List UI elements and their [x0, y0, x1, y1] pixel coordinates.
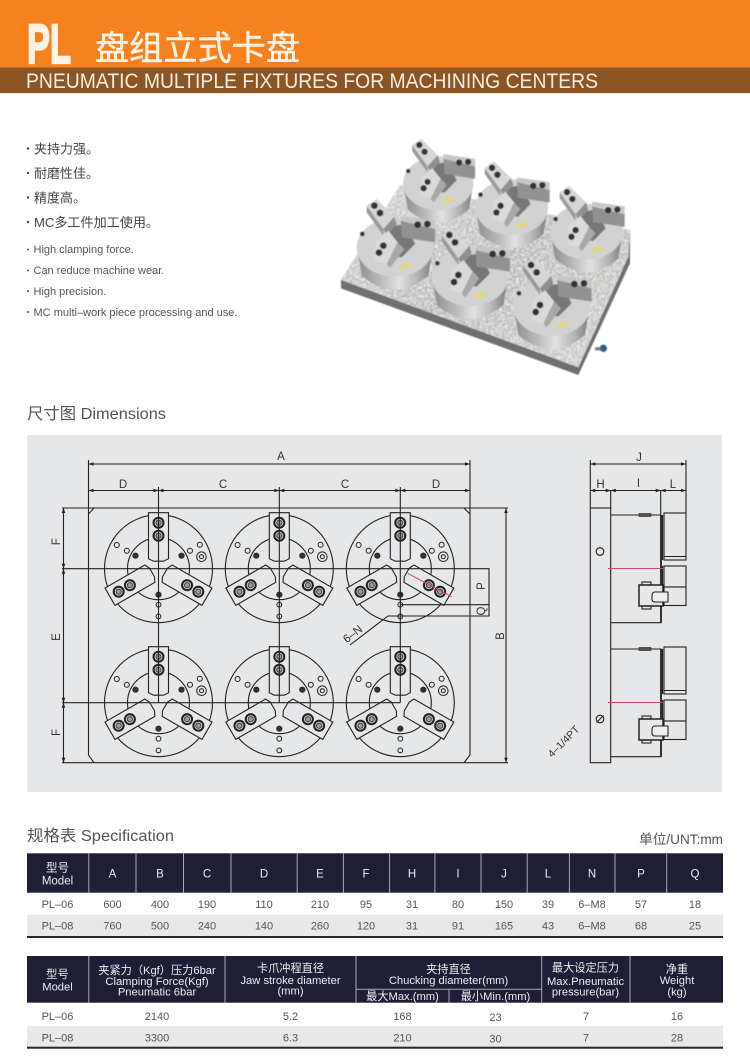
row PL-06: PL–06 — [42, 899, 73, 911]
row PL-06: 31 — [406, 899, 418, 911]
table header: 卡爪冲程直径 — [257, 961, 324, 975]
section heading: specification: 规格表 Specification — [27, 827, 174, 845]
row PL-08: 7 — [583, 1032, 589, 1044]
table header row: 型号 — [46, 860, 69, 874]
table header row: I — [456, 868, 460, 880]
dimension letters: D — [432, 479, 440, 491]
row PL-06 — [42, 899, 701, 911]
outline and dimension lines — [62, 460, 508, 763]
row PL-06: 210 — [311, 899, 329, 911]
dimension letters: F — [51, 729, 63, 736]
row PL-06: 600 — [103, 899, 122, 911]
dimension letters: C — [341, 479, 349, 491]
English feature bullets: Can reduce machine wear. — [34, 265, 164, 277]
row PL-06: 95 — [360, 899, 372, 911]
table header row: J — [501, 868, 507, 880]
row PL-06: 16 — [671, 1011, 683, 1023]
side dimension letters: H — [596, 479, 605, 491]
table header: pressure(bar) — [552, 986, 619, 998]
table header: Max.Pneumatic — [547, 976, 624, 988]
dimension letters: F — [51, 538, 63, 545]
table header: 最小Min.(mm) — [461, 990, 531, 1003]
front view drawing — [51, 451, 508, 763]
Chinese feature bullets — [27, 142, 159, 230]
English feature bullets: High precision. — [34, 286, 106, 298]
row PL-08: 68 — [635, 920, 647, 932]
table header row: A — [109, 868, 117, 880]
section heading: dimensions: 尺寸图 Dimensions — [27, 405, 166, 423]
row PL-08: 43 — [542, 920, 554, 932]
row PL-06 — [42, 1011, 683, 1024]
Chinese feature bullets: 夹持力强。 — [34, 142, 99, 156]
row PL-08: 3300 — [145, 1032, 169, 1044]
English feature bullets — [27, 244, 238, 319]
row PL-08 — [27, 914, 723, 936]
unit note: 单位/UNT:mm — [639, 832, 723, 847]
table header row: B — [156, 868, 164, 880]
table header row: L — [545, 868, 552, 880]
row PL-06: 168 — [393, 1011, 412, 1023]
dimension letters: D — [119, 479, 127, 491]
row PL-08: 25 — [689, 920, 701, 932]
side dimension letters: 4–1/4PT — [546, 723, 583, 760]
dimension letters: A — [277, 451, 285, 463]
table header: (kg) — [667, 986, 687, 998]
row PL-08: PL–08 — [42, 920, 73, 932]
product photo: six chucks on base plate — [341, 139, 630, 375]
side dimension letters: J — [636, 452, 642, 464]
row PL-08: 165 — [495, 920, 513, 932]
table header: (mm) — [277, 986, 304, 998]
row PL-08: 6.3 — [283, 1032, 298, 1044]
row PL-06: PL–06 — [42, 1011, 73, 1023]
table header row: Q — [691, 868, 700, 880]
row PL-08: 120 — [357, 920, 375, 932]
dimension letters: 6–N — [341, 623, 365, 646]
row PL-06: 18 — [689, 899, 701, 911]
dimension letters: B — [495, 632, 507, 640]
row PL-08: 240 — [198, 920, 216, 932]
row PL-06: 400 — [151, 899, 169, 911]
table header: Model — [42, 982, 73, 994]
row PL-06: 110 — [255, 899, 273, 911]
table header row: H — [408, 868, 416, 880]
row PL-08: 30 — [489, 1034, 502, 1046]
table header: 夹持直径 — [426, 962, 471, 976]
row PL-06: 80 — [452, 899, 464, 911]
English feature bullets: MC multi–work piece processing and use. — [34, 307, 238, 319]
header banner — [0, 0, 750, 94]
row PL-06: 2140 — [145, 1011, 169, 1023]
six chuck plan views — [104, 513, 454, 757]
row PL-06: 5.2 — [283, 1011, 298, 1023]
table header row: D — [260, 868, 268, 880]
table header: 最大Max.(mm) — [366, 989, 439, 1003]
row PL-08: 500 — [151, 920, 169, 932]
row PL-08: 260 — [311, 920, 329, 932]
dimension letters: Q — [476, 606, 488, 615]
side dimension letters — [546, 452, 677, 760]
dimension letters: C — [219, 479, 227, 491]
table header row: C — [203, 868, 211, 880]
table header: 净重 — [666, 962, 688, 976]
table header: Weight — [660, 975, 695, 987]
dimension letters: P — [476, 582, 488, 590]
table header: 夹紧力（Kgf）压力6bar — [98, 964, 216, 977]
table header row — [27, 853, 723, 893]
row PL-08: 31 — [406, 920, 418, 932]
feature list — [27, 142, 238, 319]
table header: Chucking diameter(mm) — [389, 975, 508, 987]
table header: Pneumatic 6bar — [118, 986, 196, 998]
panel: dimension drawing — [27, 435, 722, 792]
row PL-06: 7 — [583, 1011, 589, 1023]
table: dimension specification — [27, 853, 723, 938]
side view drawing — [546, 452, 686, 763]
dimension letters: E — [51, 633, 63, 641]
row PL-08: 140 — [255, 920, 273, 932]
Chinese title: 盘组立式卡盘 — [95, 30, 300, 68]
row PL-08: 210 — [393, 1032, 412, 1044]
table header: 最大设定压力 — [552, 960, 619, 974]
Chinese feature bullets: 精度高。 — [34, 190, 86, 206]
row PL-06: 57 — [635, 899, 647, 911]
table header row: N — [588, 868, 596, 880]
side dimension arrowheads — [590, 462, 686, 492]
series code PL: PL — [27, 12, 71, 75]
row PL-08: 6–M8 — [578, 920, 606, 932]
side dimension letters: I — [637, 478, 640, 490]
table header: 型号 — [46, 967, 69, 981]
row PL-08: 28 — [671, 1032, 683, 1044]
table header: Clamping Force(Kgf) — [105, 976, 209, 988]
table: performance specification — [27, 956, 723, 1049]
Chinese feature bullets: MC多工件加工使用。 — [34, 215, 159, 230]
row PL-06: 23 — [489, 1012, 502, 1024]
row PL-06: 39 — [542, 899, 554, 911]
table header row: F — [362, 868, 370, 880]
dimension arrowheads — [62, 462, 508, 763]
table header row: Model — [42, 876, 73, 888]
English feature bullets: High clamping force. — [34, 244, 134, 256]
table header row: P — [637, 868, 645, 880]
row PL-06: 190 — [198, 899, 216, 911]
row PL-08: PL–08 — [42, 1032, 73, 1044]
table header: Jaw stroke diameter — [240, 975, 341, 987]
table header row: E — [316, 868, 324, 880]
row PL-08 — [27, 1026, 723, 1047]
English subtitle: PNEUMATIC MULTIPLE FIXTURES FOR MACHINING CENTERS — [26, 70, 598, 93]
table header — [27, 956, 723, 1003]
row PL-06: 150 — [495, 899, 513, 911]
Chinese feature bullets: 耐磨性佳。 — [34, 166, 99, 181]
row PL-08: 91 — [452, 920, 464, 932]
section cut line — [408, 573, 452, 597]
side dimension letters: L — [670, 479, 677, 491]
dimension letters — [51, 451, 507, 736]
row PL-08: 760 — [103, 920, 122, 932]
row PL-06: 6–M8 — [578, 899, 606, 911]
